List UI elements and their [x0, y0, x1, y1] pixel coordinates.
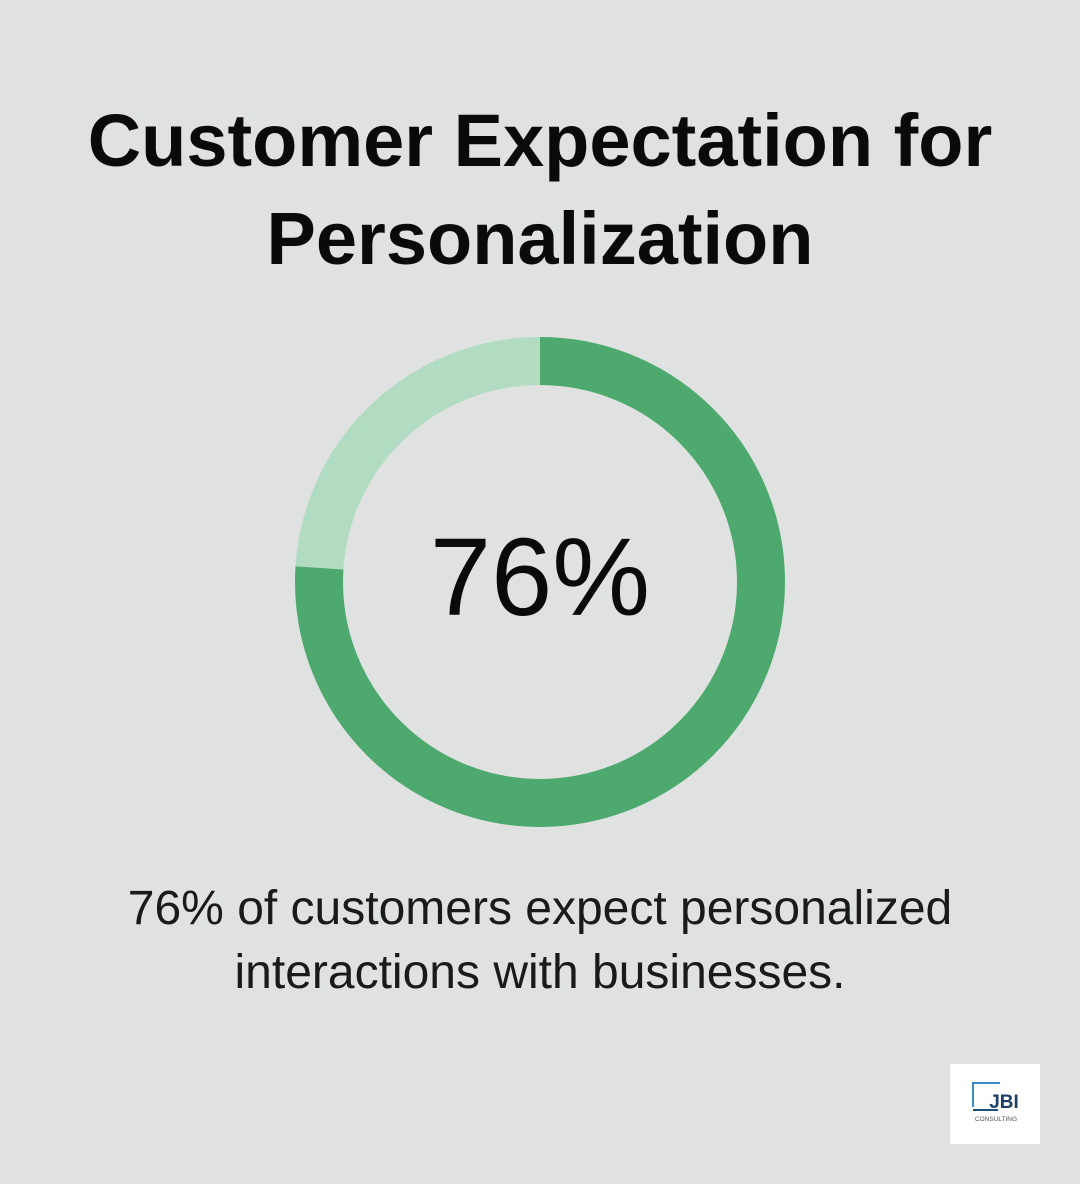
logo: JBI	[989, 1092, 1019, 1113]
ring: remaining 24%	[319, 361, 761, 803]
logo: CONSULTING	[975, 1116, 1017, 1123]
logo	[950, 1064, 1040, 1144]
ring: 76% segment	[319, 361, 761, 803]
description text: 76% of customers expect personalized	[128, 882, 952, 935]
center value: 76%	[430, 516, 650, 639]
title	[88, 99, 992, 280]
description text: interactions with businesses.	[235, 946, 845, 999]
description text	[128, 882, 952, 999]
title: Personalization	[267, 197, 813, 280]
title: Customer Expectation for	[88, 99, 992, 182]
